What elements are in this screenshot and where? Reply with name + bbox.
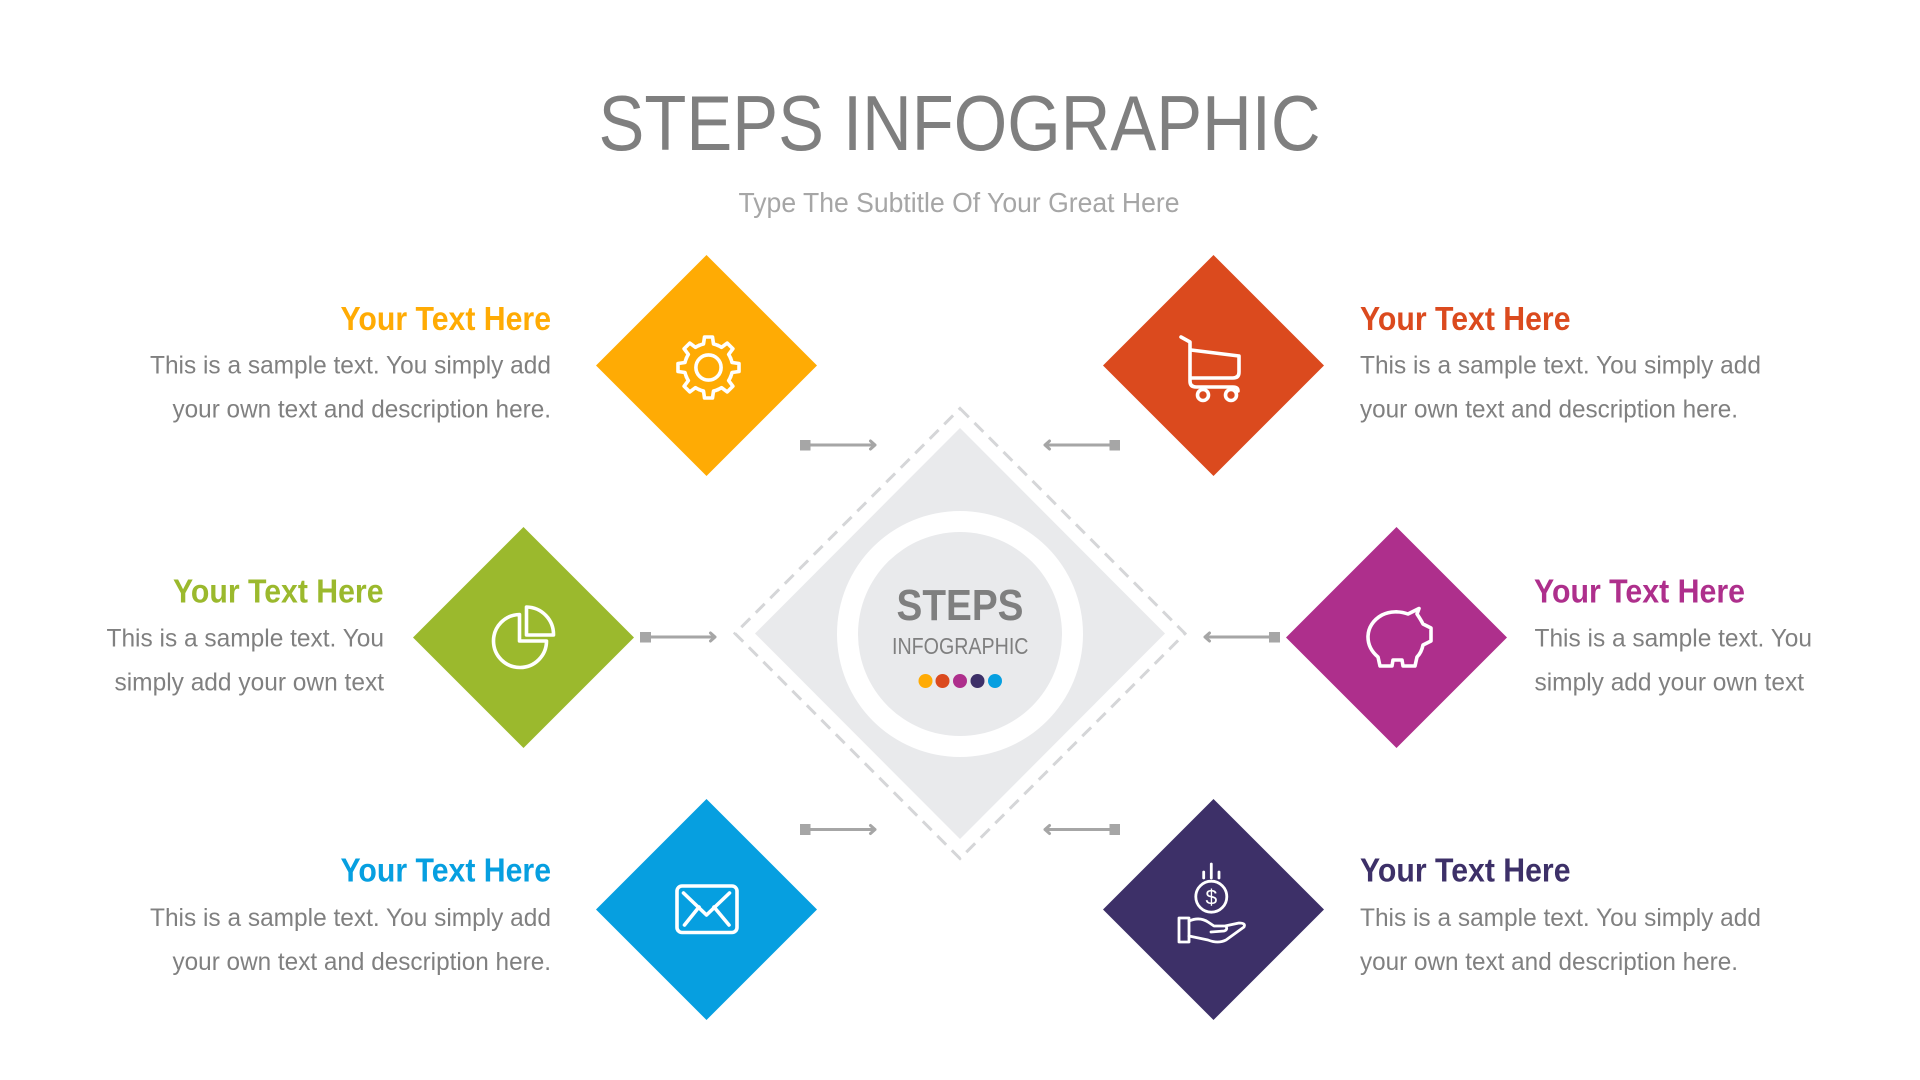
dashed diamond outline — [735, 408, 1185, 858]
icon: coin over hand: $ — [1205, 886, 1217, 910]
text block: simply add your own text — [1534, 668, 1804, 696]
central hub — [735, 408, 1185, 858]
icon: gear — [678, 337, 739, 398]
text block: This is a sample text. You simply add — [150, 904, 551, 932]
text block: Your Text Here — [1360, 300, 1570, 337]
icon: coin over hand — [1179, 864, 1244, 942]
white ring — [837, 511, 1083, 757]
text block: Your Text Here — [1360, 852, 1570, 888]
text block: This is a sample text. You — [1534, 624, 1812, 652]
text block: This is a sample text. You — [106, 624, 384, 652]
text block: your own text and description here. — [172, 396, 551, 424]
hub subheading: INFOGRAPHIC — [892, 633, 1028, 659]
red diamond — [1103, 255, 1324, 476]
arrow — [800, 440, 875, 450]
orange diamond — [596, 255, 817, 476]
title: STEPS INFOGRAPHIC — [598, 81, 1320, 167]
colour dots — [918, 674, 1002, 688]
text block: This is a sample text. You simply add — [150, 352, 551, 380]
text block — [150, 852, 551, 976]
navy diamond — [1103, 799, 1324, 1020]
arrow — [640, 632, 715, 642]
green diamond — [413, 527, 634, 748]
icon: shopping cart — [1181, 337, 1239, 400]
text block — [1360, 300, 1761, 424]
blue diamond — [596, 799, 817, 1020]
icon: piggy bank — [1368, 608, 1431, 666]
step: bottom right, money in hand — [1045, 799, 1761, 1020]
arrow — [1205, 632, 1280, 642]
arrow — [1045, 440, 1120, 450]
text block — [150, 300, 551, 424]
text block: Your Text Here — [173, 572, 384, 610]
icon: envelope — [677, 886, 737, 932]
grey centre circle — [858, 532, 1062, 736]
text block: This is a sample text. You simply add — [1360, 904, 1761, 932]
text block: your own text and description here. — [172, 948, 551, 976]
step: middle left, pie chart — [106, 527, 715, 748]
text block: Your Text Here — [340, 300, 551, 337]
text block — [1360, 852, 1761, 976]
magenta diamond — [1286, 527, 1507, 748]
text block: Your Text Here — [340, 852, 551, 888]
text block — [1534, 572, 1812, 696]
step: middle right, piggy bank — [1205, 527, 1812, 748]
text block: Your Text Here — [1534, 572, 1745, 610]
step: bottom left, envelope — [150, 799, 875, 1020]
text block: your own text and description here. — [1360, 948, 1738, 976]
step: top right, cart — [1045, 255, 1761, 476]
arrow — [800, 824, 875, 835]
subtitle: Type The Subtitle Of Your Great Here — [738, 187, 1180, 218]
text block: simply add your own text — [114, 668, 384, 696]
step: top left, gear — [150, 255, 875, 476]
arrow — [1045, 824, 1120, 835]
text block — [106, 572, 384, 696]
hub heading: STEPS — [896, 582, 1024, 630]
icon: pie chart — [494, 607, 554, 667]
text block: your own text and description here. — [1360, 396, 1738, 424]
grey diamond — [755, 428, 1165, 839]
text block: This is a sample text. You simply add — [1360, 352, 1761, 380]
